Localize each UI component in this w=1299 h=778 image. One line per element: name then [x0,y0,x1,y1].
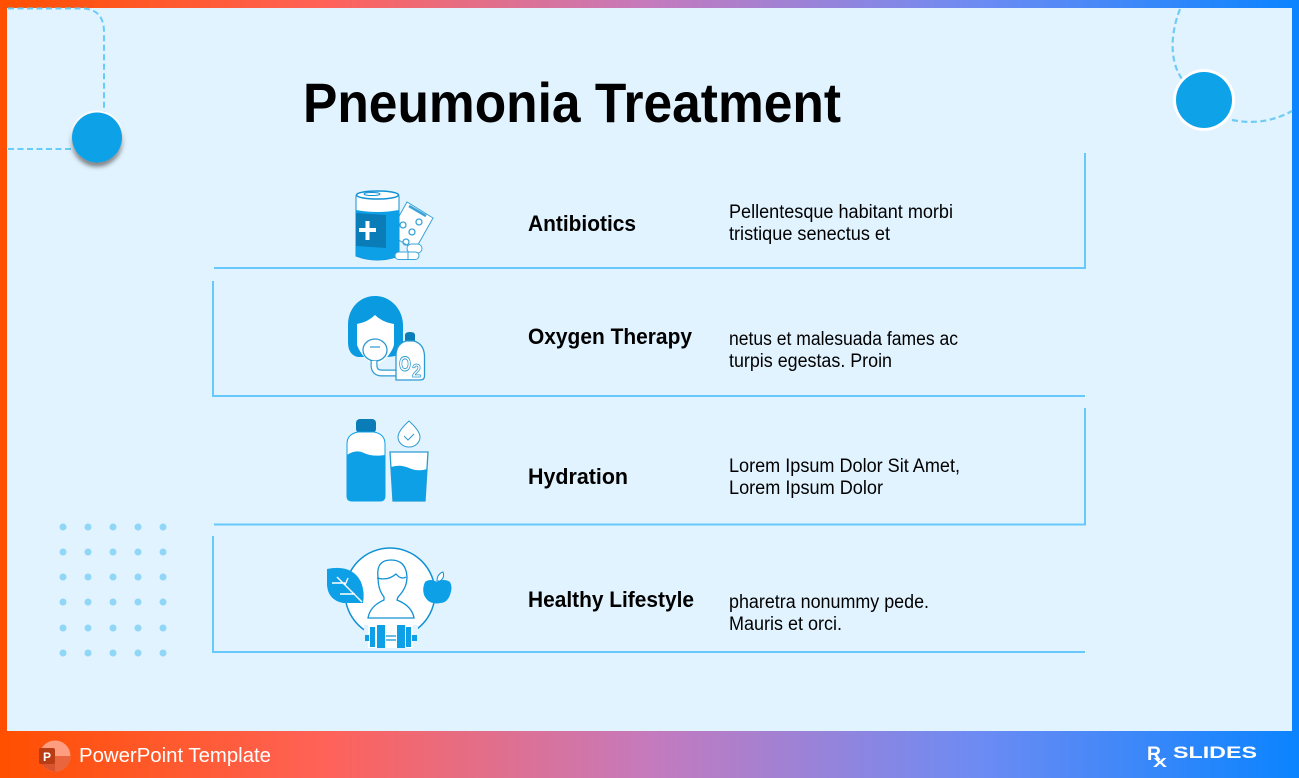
decoration: top-right dashed arc and circle [1173,9,1292,131]
panel: healthy lifestyle [327,548,929,648]
footer: PowerPoint logo: P [43,750,51,764]
footer: RxSlides logo [1147,743,1257,770]
panel: hydration [347,419,960,501]
footer: RxSlides logo: X [1153,755,1168,770]
heading: oxygen therapy: Oxygen Therapy [528,324,692,349]
icon: medicine bottle and blister pack [356,191,433,260]
heading: hydration: Hydration [528,464,628,489]
panel: oxygen therapy [348,296,958,381]
panel: antibiotics [356,191,953,260]
footer: template label: PowerPoint Template [79,744,271,767]
title: Pneumonia Treatment [303,71,841,134]
text: hydration description: Lorem Ipsum Dolor Sit Amet, [729,456,960,477]
icon: patient with oxygen mask and tank: O [399,353,411,376]
footer: RxSlides logo: R [1147,744,1161,765]
heading: healthy lifestyle: Healthy Lifestyle [528,587,694,612]
text: hydration description: Lorem Ipsum Dolor [729,478,884,499]
text: oxygen therapy description: turpis egestas. Proin [729,351,892,372]
text: antibiotics description: tristique senectus et [729,224,891,245]
footer: RxSlides logo: SLIDES [1173,743,1257,762]
icon: patient with oxygen mask and tank: 2 [412,361,421,381]
text: healthy lifestyle description: pharetra nonummy pede. [729,592,929,613]
icon: water bottle, glass and droplet [347,419,428,501]
text: oxygen therapy description: netus et malesuada fames ac [729,329,958,350]
footer: PowerPoint logo [39,740,70,772]
text: antibiotics description: Pellentesque habitant morbi [729,202,953,223]
decoration: dot grid [60,524,166,656]
icon: person with leaf, apple and dumbbell [327,548,452,648]
row frame lines [213,153,1085,652]
decoration: top-left dashed connector and circle [8,8,124,164]
heading: antibiotics: Antibiotics [528,211,636,236]
text: healthy lifestyle description: Mauris et orci. [729,614,842,635]
icon: patient with oxygen mask and tank [348,296,424,381]
